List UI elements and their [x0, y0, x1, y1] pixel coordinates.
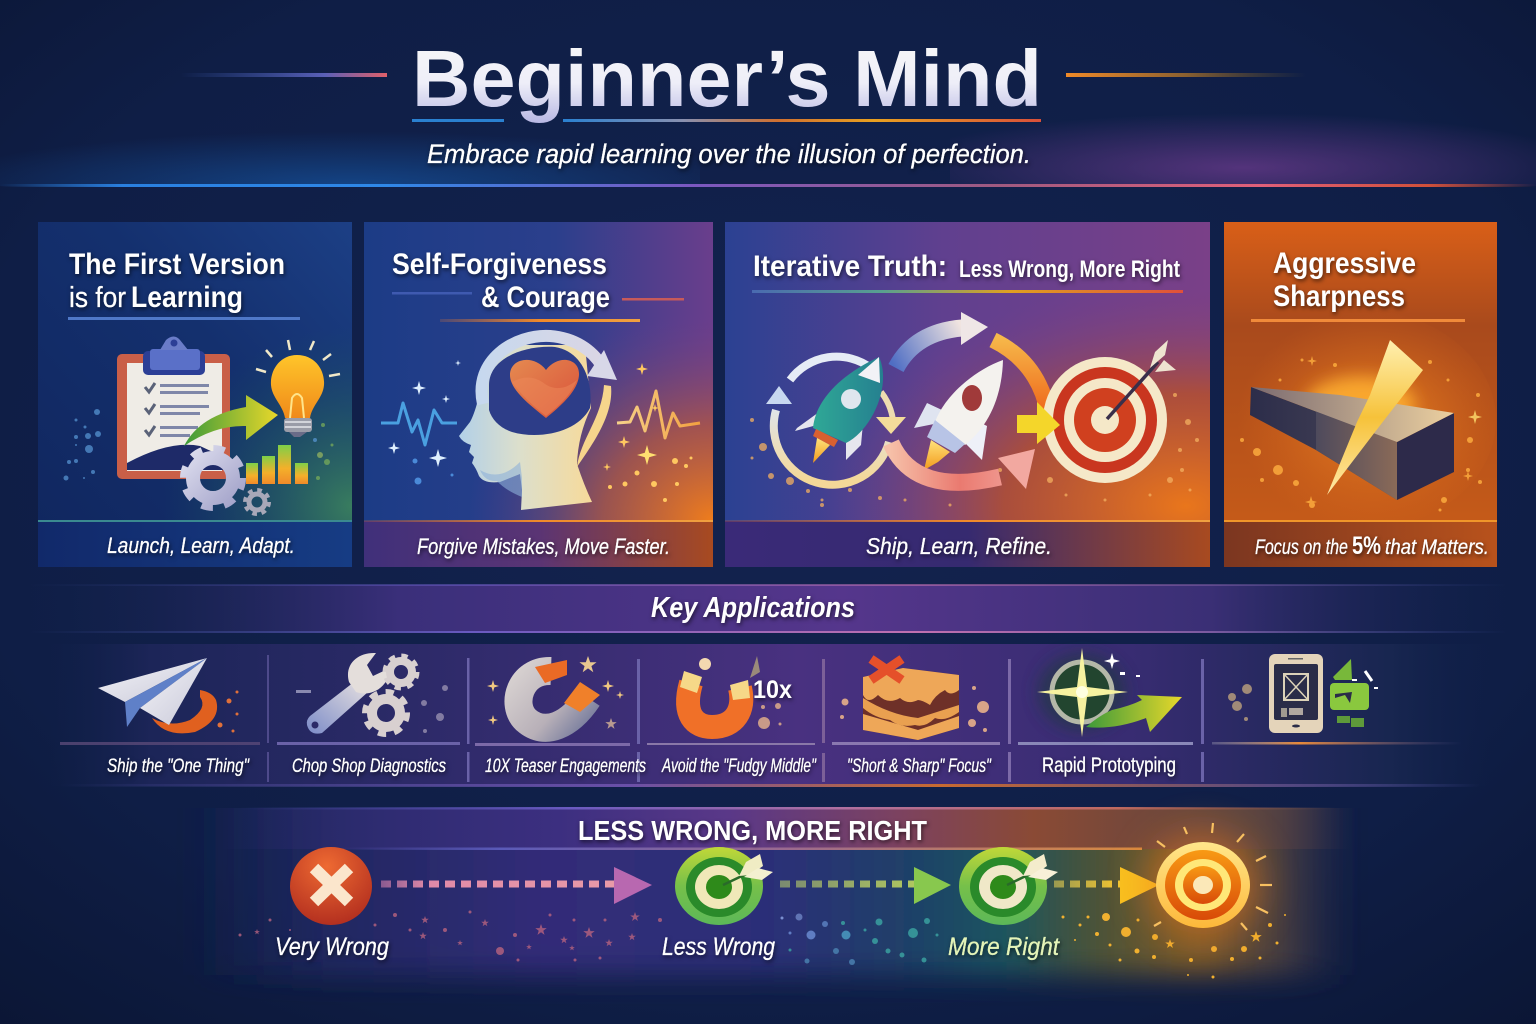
icon: pink arc arrow — [891, 443, 1035, 489]
panel 3 heading — [753, 250, 1180, 283]
icon: north star compass and arrow — [1037, 648, 1182, 737]
panel 4 caption: Focus on the — [1255, 536, 1348, 559]
step: very wrong: Very Wrong — [275, 933, 389, 961]
panel 1 caption: Launch, Learn, Adapt. — [107, 533, 295, 558]
step: more right — [948, 847, 1060, 961]
icon: light bulb — [256, 340, 340, 437]
icon: blue arc arrow — [896, 312, 988, 368]
item labels — [107, 754, 1176, 777]
icon: phone and prototype — [1228, 654, 1378, 733]
icon: lightning bolt — [1327, 340, 1423, 495]
icon: blunt wedge — [1250, 387, 1454, 500]
item labels: "Short & Sharp" Focus" — [847, 756, 992, 777]
icon: layered cake with cross — [840, 659, 989, 740]
panel 3 heading: Less Wrong, More Right — [959, 256, 1180, 283]
icon: orange arc arrow — [993, 340, 1048, 412]
icon: yellow arrow — [1017, 402, 1060, 444]
panel: the first version is for learning — [38, 222, 352, 567]
key applications band — [30, 584, 1506, 633]
item labels: Rapid Prototyping — [1042, 754, 1176, 777]
icon: large gear — [184, 449, 242, 507]
panel 1 heading: The First Version — [69, 248, 285, 281]
icon: clipboard — [117, 336, 230, 479]
icon: right pulse — [617, 391, 700, 438]
arrow: very wrong to less wrong — [381, 867, 652, 904]
icon: horseshoe magnet — [487, 656, 624, 729]
progression heading: LESS WRONG, MORE RIGHT — [578, 815, 927, 846]
particles: gold dots — [1062, 913, 1286, 978]
panel 4 caption: that Matters. — [1385, 536, 1489, 559]
panel 2 heading: Self-Forgiveness — [392, 248, 607, 281]
arrow: more right to goal — [1054, 867, 1159, 904]
header glow — [0, 95, 1536, 186]
panel 2 caption: Forgive Mistakes, Move Faster. — [417, 534, 670, 559]
icon: left pulse — [381, 403, 457, 445]
title: Beginner’s Mind — [412, 34, 1042, 123]
panel 4 caption: 5% — [1352, 532, 1381, 560]
sparkles — [388, 360, 461, 484]
particles: teal dots — [780, 914, 938, 965]
icon: paper plane — [98, 658, 238, 733]
panel 1 heading — [69, 248, 285, 314]
step: less wrong — [662, 847, 775, 961]
panel: self-forgiveness and courage — [364, 222, 713, 567]
item labels: 10X Teaser Engagements — [485, 756, 646, 777]
particles: pink stars — [238, 910, 662, 962]
title — [180, 34, 1306, 123]
step: very wrong — [275, 847, 389, 961]
icon: teal rocket — [795, 357, 883, 463]
step: goal target — [1147, 823, 1272, 937]
less wrong more right progression — [190, 780, 1350, 978]
icon: white rocket — [914, 360, 1003, 470]
step: more right: More Right — [948, 933, 1060, 961]
icon: target — [1043, 340, 1176, 483]
particles — [750, 393, 1199, 507]
step: less wrong: Less Wrong — [662, 933, 775, 961]
panel 4 heading: Sharpness — [1273, 280, 1405, 313]
key applications heading: Key Applications — [651, 592, 855, 624]
icon: circular loop — [766, 357, 906, 485]
panel 2 heading: & Courage — [481, 281, 610, 314]
item labels: Avoid the "Fudgy Middle" — [661, 756, 817, 777]
panel 1 heading: Learning — [131, 281, 243, 314]
icon: wrench and gears — [296, 653, 448, 734]
item labels: Chop Shop Diagnostics — [292, 756, 446, 777]
particles — [64, 409, 334, 480]
subtitle: Embrace rapid learning over the illusion of perfection. — [427, 139, 1031, 169]
icon: orange magnet with 10x: 10x — [753, 676, 792, 704]
panel 3 caption: Ship, Learn, Refine. — [866, 533, 1052, 559]
icon: growth arrow — [184, 395, 278, 446]
icon: small gear — [245, 490, 269, 514]
icon: orange magnet with 10x — [680, 656, 792, 729]
particles — [1240, 356, 1482, 512]
panel 1 heading: is for — [69, 282, 126, 314]
panel 2 heading — [392, 248, 610, 314]
icon: bars — [246, 445, 308, 484]
item labels: Ship the "One Thing" — [107, 756, 250, 777]
header divider — [0, 184, 1536, 187]
panel: iterative truth — [725, 222, 1210, 567]
panel 3 heading: Iterative Truth: — [753, 250, 947, 283]
icon: head with heart — [459, 336, 617, 510]
key applications row — [50, 644, 1490, 787]
panel 4 heading — [1273, 247, 1416, 313]
panel 4 caption — [1255, 532, 1489, 560]
arrow: less wrong to more right — [780, 867, 951, 904]
panel 4 heading: Aggressive — [1273, 247, 1416, 280]
panel: aggressive sharpness — [1224, 222, 1497, 567]
dividers and underlines — [60, 655, 1462, 782]
glow behind wedge — [1305, 377, 1415, 433]
